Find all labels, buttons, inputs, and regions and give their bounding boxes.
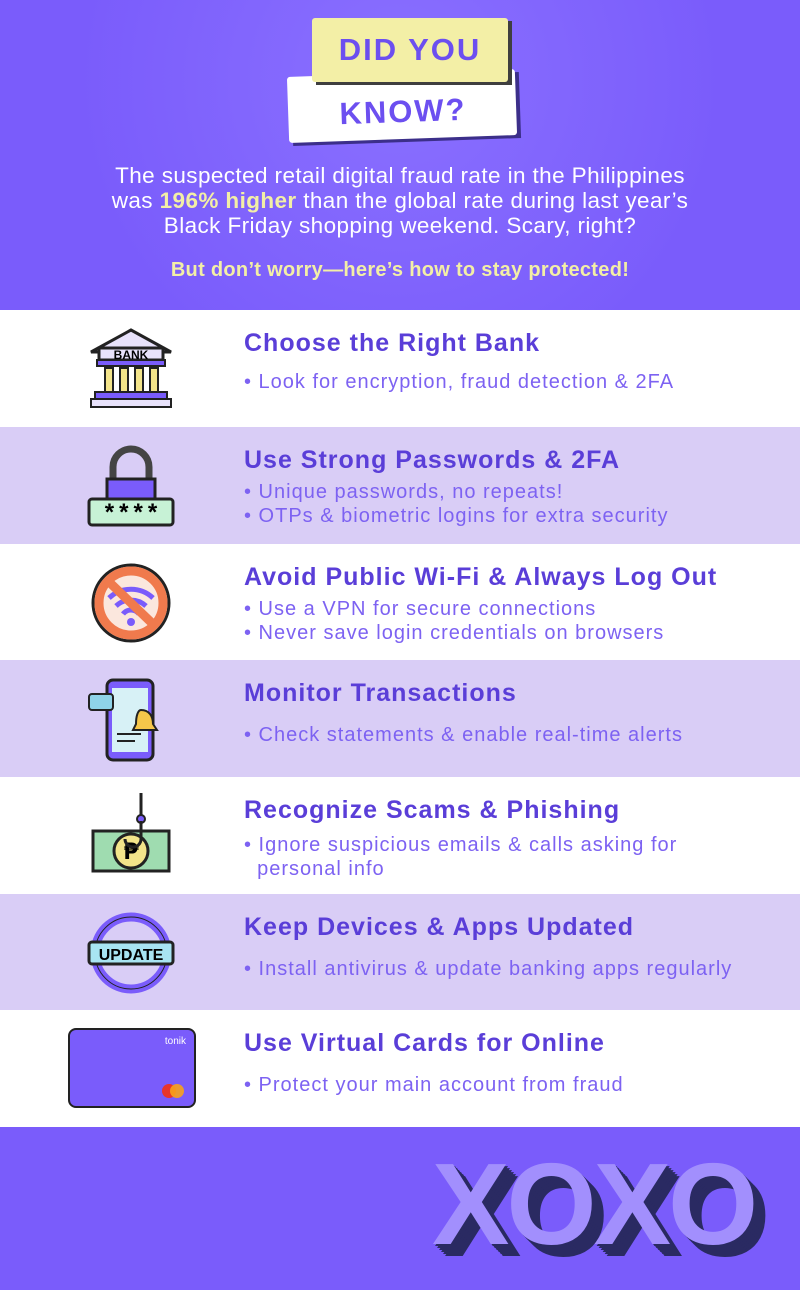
row: scams: personal info <box>257 858 385 880</box>
intro text: The suspected retail digital fraud rate in the Philippines <box>115 163 685 188</box>
row: wifi: • Use a VPN for secure connections <box>244 598 596 620</box>
row: bank: Choose the Right Bank <box>244 329 540 357</box>
icon: phone bell <box>88 678 159 762</box>
row: scams: Recognize Scams & Phishing <box>244 796 620 824</box>
subheading: But don’t worry—here’s how to stay protected! <box>171 259 629 281</box>
row: scams <box>0 777 800 894</box>
header panel <box>0 0 800 310</box>
row: update: Keep Devices & Apps Updated <box>244 913 634 941</box>
icon: update <box>88 912 174 994</box>
row: update: • Install antivirus & update banking apps regularly <box>244 958 732 980</box>
row: scams: • Ignore suspicious emails & calls asking for <box>244 834 677 856</box>
row: virtual cards: • Protect your main account from fraud <box>244 1074 624 1096</box>
icon: card: tonik <box>165 1036 186 1047</box>
badge: did you know: DID YOU <box>339 32 481 67</box>
row: bank: • Look for encryption, fraud detection & 2FA <box>244 371 674 393</box>
intro text <box>112 163 688 238</box>
icon: lock: **** <box>102 502 160 529</box>
intro text: Black Friday shopping weekend. Scary, right? <box>164 213 636 238</box>
badge: did you know <box>287 18 522 146</box>
row: update <box>0 894 800 1011</box>
row: virtual cards: Use Virtual Cards for Online <box>244 1029 605 1057</box>
icon: lock <box>88 446 174 529</box>
row: monitor: Monitor Transactions <box>244 679 517 707</box>
badge: did you know: KNOW? <box>339 92 467 131</box>
icon: hooked peso: ₱ <box>123 840 139 865</box>
row: virtual cards <box>0 1010 800 1127</box>
row: wifi <box>0 544 800 661</box>
row: passwords: • Unique passwords, no repeats! <box>244 481 563 503</box>
icon: card <box>68 1028 196 1108</box>
row: wifi: • Never save login credentials on browsers <box>244 622 664 644</box>
row: passwords: • OTPs & biometric logins for extra security <box>244 505 668 527</box>
row: wifi: Avoid Public Wi-Fi & Always Log Out <box>244 563 717 591</box>
row: bank <box>0 310 800 427</box>
icon: bank <box>90 328 172 408</box>
icon: no wifi <box>92 564 170 642</box>
row: passwords <box>0 427 800 544</box>
intro text: was 196% higher than the global rate during last year’s <box>112 188 688 213</box>
icon: hooked peso <box>92 793 170 872</box>
row: passwords: Use Strong Passwords & 2FA <box>244 446 620 474</box>
row: monitor: • Check statements & enable real-time alerts <box>244 724 683 746</box>
icon: update: UPDATE <box>99 947 164 964</box>
footer: xoxo: XOXO <box>432 1139 755 1269</box>
icon: bank: BANK <box>114 348 149 362</box>
row: monitor <box>0 660 800 777</box>
